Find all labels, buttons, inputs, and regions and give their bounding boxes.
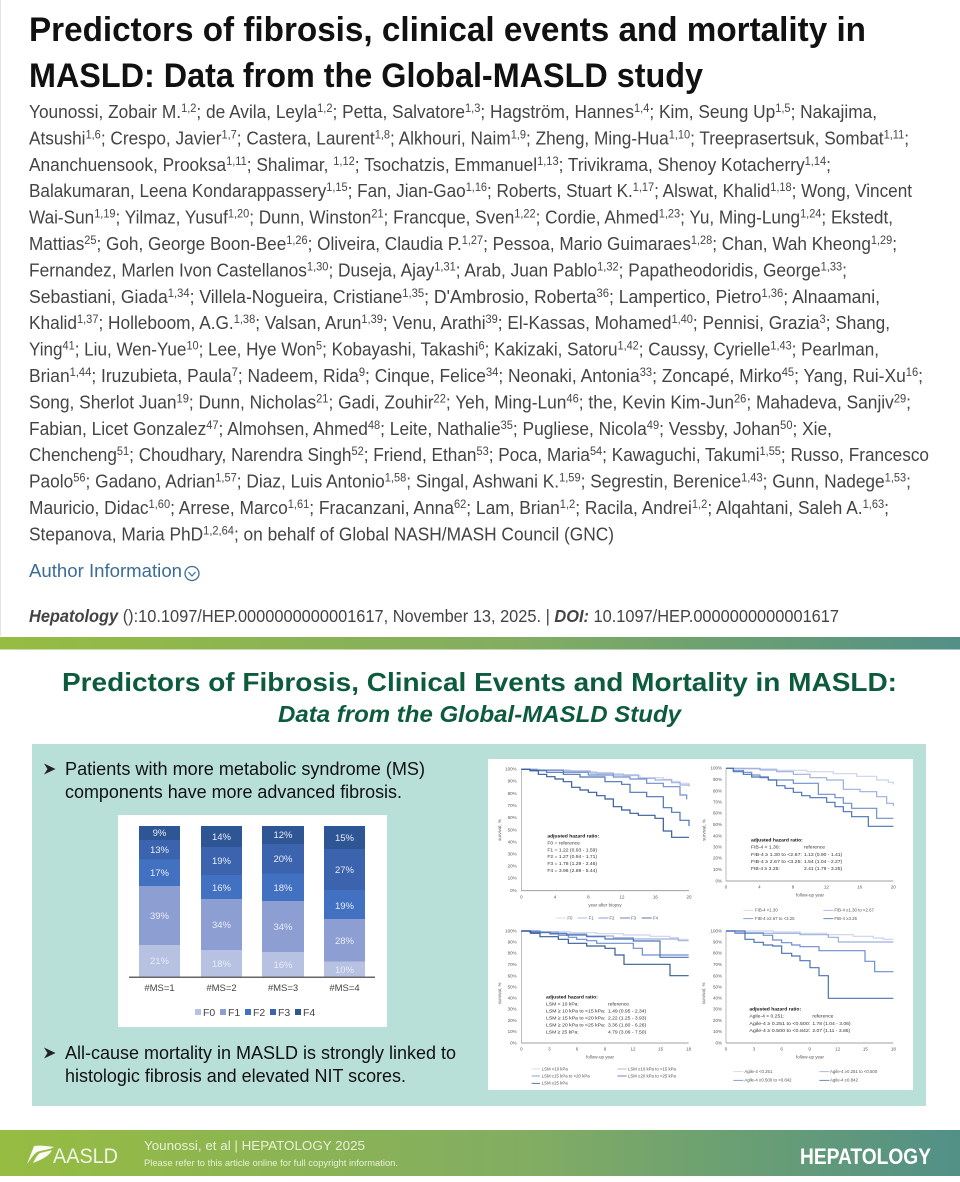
chart legend: F2	[253, 1007, 265, 1019]
survival chart: Agile-4: 12	[835, 1047, 841, 1052]
curve legend	[532, 1066, 677, 1086]
author list: Brian1,44; Iruzubieta, Paula7; Nadeem, Rida9; Cinque, Felice34; Neonaki, Antonia33; Zoncapé, Mirko45; Yang, Rui-Xu16;	[29, 366, 923, 386]
survival chart: biopsy fibrosis stage: 0	[520, 894, 523, 899]
abstract heading	[62, 667, 897, 727]
survival chart: biopsy fibrosis stage: 100%	[505, 767, 517, 772]
hazard ratio annotation: Agile-4 ≥ 0.251 to <0.500:	[749, 1021, 810, 1027]
survival chart: FIB-4: 12	[824, 885, 829, 890]
hazard ratio annotation: 1.54 (1.04 - 2.27)	[804, 859, 843, 865]
hazard ratio annotation: 2.41 (1.79 - 3.25)	[804, 866, 843, 872]
hazard ratio annotation: reference	[608, 1001, 629, 1007]
bar: MS=1: 17%	[150, 868, 170, 879]
hazard ratio annotation: 2.07 (1.11 - 3.85)	[812, 1028, 851, 1034]
hazard ratio annotation: adjusted hazard ratio:	[749, 1006, 801, 1012]
hazard ratio annotation: F0 = reference	[547, 840, 580, 846]
survival chart: Agile-4: follow-up year	[796, 1055, 824, 1060]
chart legend: F0	[203, 1007, 215, 1019]
survival chart: Agile-4: 80%	[713, 951, 722, 956]
curve legend: Agile-4 ≥0.842	[830, 1078, 858, 1083]
survival chart: biopsy fibrosis stage: 30%	[508, 851, 517, 856]
hazard ratio annotation: FIB-4 ≥ 2.67 to <3.25:	[751, 859, 802, 865]
author list: Fernandez, Marlen Ivon Castellanos1,30; Duseja, Ajay1,31; Arab, Juan Pablo1,32; Papatheodoridis, George1,33;	[29, 260, 847, 280]
survival chart: biopsy fibrosis stage: 60%	[508, 815, 517, 820]
survival chart: LSM: 60%	[508, 973, 517, 978]
bar: MS=3: 12%	[273, 830, 293, 841]
curve legend: F0	[567, 915, 573, 920]
survival chart: FIB-4: 20%	[713, 856, 722, 861]
bar: MS=2: 18%	[212, 959, 232, 970]
author list: Paolo56; Gadano, Adrian1,57; Diaz, Luis Antonio1,58; Singal, Ashwani K.1,59; Segrestin, Berenice1,43; Gunn, Nadege1,53;	[29, 472, 911, 492]
bar: MS=1: 39%	[150, 911, 170, 922]
hazard ratio annotation: LSM < 10 kPa:	[546, 1001, 579, 1007]
survival chart: LSM: follow-up year	[586, 1055, 614, 1060]
bar: MS=4: 28%	[335, 936, 355, 947]
author list: Wai-Sun1,19; Yilmaz, Yusuf1,20; Dunn, Winston21; Francque, Sven1,22; Cordie, Ahmed1,23; Yu, Ming-Lung1,24; Ekstedt,	[29, 208, 893, 228]
survival chart: LSM: 40%	[508, 996, 517, 1001]
survival chart: FIB-4: 60%	[713, 811, 722, 816]
author list: Ying41; Liu, Wen-Yue10; Lee, Hye Won5; Kobayashi, Takashi6; Kakizaki, Satoru1,42; Caussy, Cyrielle1,43; Pearlman,	[29, 340, 879, 360]
survival chart: LSM: 0%	[510, 1040, 517, 1045]
curve legend: F2	[609, 915, 615, 920]
survival chart: LSM: 18	[686, 1047, 692, 1052]
hazard ratio annotation	[751, 837, 843, 872]
panel: survival curves background	[488, 759, 913, 1090]
bar: MS=4: 27%	[335, 865, 355, 876]
hazard ratio annotation	[749, 1006, 851, 1034]
bar: MS=2: 14%	[212, 832, 232, 843]
bar: MS=2: 16%	[212, 883, 232, 894]
survival chart: LSM: 9	[604, 1047, 607, 1052]
footer citation: Please refer to this article online for full copyright information.	[144, 1158, 398, 1169]
author list: Chencheng51; Choudhary, Narendra Singh52; Friend, Ethan53; Poca, Maria54; Kawaguchi, Takumi1,55; Russo, Francesco	[29, 445, 929, 465]
survival chart: biopsy fibrosis stage: 90%	[508, 779, 517, 784]
bar: MS=3: 16%	[273, 960, 293, 971]
author list: Mattias25; Goh, George Boon-Bee1,26; Oliveira, Claudia P.1,27; Pessoa, Mario Guimaraes1,28; Chan, Wah Kheong1,29;	[29, 234, 897, 254]
bar: MS=2	[201, 826, 242, 977]
survival chart: Agile-4: 15	[863, 1047, 868, 1052]
survival chart: biopsy fibrosis stage: 10%	[508, 876, 517, 881]
curve legend: Agile-4 ≥0.251 to <0.500	[830, 1069, 878, 1074]
category labels	[144, 983, 360, 994]
survival chart: Agile-4: 70%	[713, 962, 722, 967]
survival chart: FIB-4	[701, 766, 896, 921]
hazard ratio annotation	[546, 994, 647, 1036]
title	[29, 11, 866, 95]
survival chart: LSM: 0	[520, 1047, 523, 1052]
bar: MS=2: 19%	[212, 856, 232, 867]
bar: MS=4: 15%	[335, 833, 355, 844]
hazard ratio annotation: adjusted hazard ratio:	[547, 833, 599, 839]
hazard ratio annotation: 4.79 (3.06 - 7.50)	[608, 1030, 647, 1036]
survival chart: LSM: 80%	[508, 951, 517, 956]
survival chart: biopsy fibrosis stage: survival, %	[497, 819, 502, 841]
hazard ratio annotation: Agile-4 ≥ 0.500 to <0.842:	[749, 1028, 810, 1034]
stacked bar chart: fibrosis by MS components	[118, 815, 387, 1027]
hazard ratio annotation: LSM ≥ 10 kPa to <15 kPa:	[546, 1008, 605, 1014]
hazard ratio annotation: 1.49 (0.95 - 2.34)	[608, 1008, 647, 1014]
survival chart: biopsy fibrosis stage: 8	[587, 894, 590, 899]
curve legend: LSM ≥25 kPa	[542, 1081, 568, 1086]
survival chart: LSM: 10%	[508, 1029, 517, 1034]
survival chart: LSM: 90%	[508, 940, 517, 945]
hazard ratio annotation: FIB-4 ≥ 3.25:	[751, 866, 780, 872]
curve legend: F3	[631, 915, 637, 920]
bar: MS=1	[139, 826, 180, 977]
survival chart: Agile-4: 60%	[713, 973, 722, 978]
survival chart: LSM: survival, %	[497, 982, 502, 1004]
survival chart: biopsy fibrosis stage: year after biopsy	[588, 902, 622, 907]
curve legend: FIB-4 <1.30	[755, 908, 778, 913]
survival chart: Agile-4: survival, %	[701, 982, 706, 1004]
curve legend: Agile-4 <0.251	[744, 1069, 773, 1074]
finding 2 text	[44, 1042, 456, 1086]
hazard ratio annotation: reference	[812, 1014, 834, 1020]
hazard ratio annotation: F4 = 3.96 (2.89 - 5.44)	[547, 868, 597, 874]
bar: MS=1: 9%	[153, 828, 167, 839]
survival chart: Agile-4: 3	[753, 1047, 756, 1052]
survival chart: biopsy fibrosis stage: 40%	[508, 839, 517, 844]
journal name: HEPATOLOGY	[800, 1144, 931, 1169]
category labels: #MS=1	[144, 983, 175, 994]
curve legend: F4	[653, 915, 659, 920]
author list: Atsushi1,6; Crespo, Javier1,7; Castera, Laurent1,8; Alkhouri, Naim1,9; Zheng, Ming-Hua1,10; Treeprasertsuk, Sombat1,11;	[29, 128, 909, 148]
hazard ratio annotation: adjusted hazard ratio:	[751, 837, 803, 843]
survival chart: biopsy fibrosis stage: 70%	[508, 803, 517, 808]
curve legend: FIB-4 ≥1.30 to <2.67	[834, 908, 874, 913]
survival chart: biopsy fibrosis stage: 80%	[508, 791, 517, 796]
survival chart: LSM	[497, 928, 692, 1086]
survival chart: FIB-4: 16	[857, 885, 863, 890]
finding 1 text: components have more advanced fibrosis.	[65, 781, 402, 802]
abstract heading: Predictors of Fibrosis, Clinical Events and Mortality in MASLD:	[62, 667, 897, 697]
survival chart: biopsy fibrosis stage: 50%	[508, 827, 517, 832]
hazard ratio annotation: F2 = 1.27 (0.94 - 1.71)	[547, 854, 597, 860]
survival chart: FIB-4: 4	[758, 885, 761, 890]
author information link: Author Information	[29, 561, 182, 581]
hazard ratio annotation: adjusted hazard ratio:	[546, 994, 598, 1000]
panel: summary background	[32, 744, 926, 1106]
curve legend: LSM ≥15 kPa to <20 kPa	[542, 1073, 590, 1078]
survival chart: Agile-4	[701, 928, 896, 1083]
hazard ratio annotation: 1.78 (1.04 - 3.06)	[812, 1021, 851, 1027]
curve legend: FIB-4 ≥2.67 to <3.25	[755, 916, 795, 921]
bar: MS=2: 34%	[212, 920, 232, 931]
survival chart: Agile-4: 90%	[713, 940, 722, 945]
curve legend	[743, 908, 874, 921]
finding 2 text: histologic fibrosis and elevated NIT scores.	[65, 1065, 406, 1086]
title: MASLD: Data from the Global-MASLD study	[29, 57, 703, 95]
icon: AASLD logo: AASLD	[53, 1145, 118, 1168]
chart legend: F4	[303, 1007, 315, 1019]
bar: MS=4	[324, 826, 365, 977]
chart legend: F1	[228, 1007, 240, 1019]
author list: Mauricio, Didac1,60; Arrese, Marco1,61; Fracanzani, Anna62; Lam, Brian1,2; Racila, Andrei1,2; Alqahtani, Saleh A.1,63;	[29, 498, 889, 518]
title: Predictors of fibrosis, clinical events and mortality in	[29, 11, 866, 49]
hazard ratio annotation: FIB-4 ≥ 1.30 to <2.67:	[751, 852, 802, 858]
hazard ratio annotation: LSM ≥ 20 kPa to <25 kPa:	[546, 1022, 605, 1028]
curve legend: Agile-4 ≥0.500 to <0.842	[744, 1078, 792, 1083]
survival chart: Agile-4: 10%	[713, 1029, 722, 1034]
curve legend	[556, 915, 659, 920]
survival chart: LSM: 50%	[508, 984, 517, 989]
survival chart: LSM: 12	[630, 1047, 636, 1052]
author list: Khalid1,37; Holleboom, A.G.1,38; Valsan, Arun1,39; Venu, Arathi39; El-Kassas, Mohamed1,40; Pennisi, Grazia3; Shang,	[29, 313, 890, 333]
bar: MS=4: 19%	[335, 901, 355, 912]
footer citation	[144, 1139, 398, 1169]
survival chart: FIB-4: 40%	[713, 833, 722, 838]
bar: MS=1: 13%	[150, 845, 170, 856]
survival chart: FIB-4: 20	[891, 885, 896, 890]
survival chart: LSM: 70%	[508, 962, 517, 967]
survival chart: biopsy fibrosis stage: 4	[554, 894, 557, 899]
hazard ratio annotation	[547, 833, 599, 874]
curve legend: F1	[589, 915, 594, 920]
top gradient banner	[0, 637, 960, 650]
hazard ratio annotation: 1.13 (0.90 - 1.41)	[804, 852, 843, 858]
survival chart: Agile-4: 0	[725, 1047, 728, 1052]
survival chart: FIB-4: follow-up year	[796, 892, 824, 897]
hazard ratio annotation: 2.22 (1.25 - 3.93)	[608, 1015, 647, 1021]
survival chart: Agile-4: 40%	[713, 996, 722, 1001]
category labels: #MS=4	[329, 983, 360, 994]
author list: Younossi, Zobair M.1,2; de Avila, Leyla1,2; Petta, Salvatore1,3; Hagström, Hannes1,4; Kim, Seung Up1,5; Nakajima,	[29, 102, 877, 122]
curve legend: LSM ≥20 kPa to <25 kPa	[628, 1073, 677, 1078]
survival chart: biopsy fibrosis stage: 0%	[510, 888, 517, 893]
category labels: #MS=2	[206, 983, 237, 994]
bar: MS=1: 21%	[150, 956, 170, 967]
footer citation: Younossi, et al | HEPATOLOGY 2025	[144, 1139, 365, 1153]
curve legend	[733, 1069, 878, 1083]
finding 1 text: Patients with more metabolic syndrome (MS)	[65, 758, 425, 779]
survival chart: FIB-4: 70%	[713, 800, 722, 805]
hazard ratio annotation: F1 = 1.22 (0.93 - 1.59)	[547, 847, 597, 853]
survival chart: FIB-4: 50%	[713, 822, 722, 827]
survival chart: Agile-4: 30%	[713, 1007, 722, 1012]
survival chart: LSM: 15	[658, 1047, 664, 1052]
hazard ratio annotation: F3 = 1.78 (1.29 - 2.46)	[547, 861, 597, 867]
finding 1 text	[44, 758, 425, 802]
icon: AASLD logo	[27, 1145, 118, 1168]
survival chart: FIB-4: 0	[725, 885, 728, 890]
survival chart: FIB-4: 8	[792, 885, 795, 890]
survival chart: FIB-4: 30%	[713, 844, 722, 849]
citation and DOI: Hepatology ():10.1097/HEP.0000000000001617, November 13, 2025. | DOI: 10.1097/HEP.0000000000001617	[29, 606, 839, 626]
bar: MS=3: 18%	[273, 883, 293, 894]
survival chart: Agile-4: 6	[780, 1047, 783, 1052]
bar: MS=4: 10%	[335, 965, 355, 976]
finding 2 text: All-cause mortality in MASLD is strongly linked to	[65, 1042, 456, 1063]
survival chart: FIB-4: survival, %	[701, 819, 706, 841]
category labels: #MS=3	[268, 983, 298, 994]
survival chart: LSM: 100%	[505, 928, 517, 933]
survival chart: FIB-4: 80%	[713, 788, 722, 793]
curve legend: FIB-4 ≥3.25	[834, 916, 858, 921]
survival chart: FIB-4: 0%	[716, 878, 722, 883]
author list: Stepanova, Maria PhD1,2,64; on behalf of Global NASH/MASH Council (GNC)	[29, 524, 614, 544]
footer banner	[0, 1130, 960, 1176]
author list: Fabian, Licet Gonzalez47; Almohsen, Ahmed48; Leite, Nathalie35; Pugliese, Nicola49; Vessby, Johan50; Xie,	[29, 419, 832, 439]
chart legend: F3	[278, 1007, 290, 1019]
survival chart: Agile-4: 0%	[716, 1040, 722, 1045]
chart legend	[195, 1007, 315, 1019]
curve legend: LSM ≥10 kPa to <15 kPa	[628, 1066, 677, 1071]
survival chart: LSM: 20%	[508, 1018, 517, 1023]
survival chart: FIB-4: 100%	[711, 766, 722, 771]
survival chart: biopsy fibrosis stage	[497, 767, 692, 920]
author list	[29, 102, 929, 544]
survival chart: Agile-4: 9	[808, 1047, 811, 1052]
survival chart: LSM: 6	[576, 1047, 579, 1052]
hazard ratio annotation: 3.36 (1.80 - 6.26)	[608, 1022, 647, 1028]
survival chart: biopsy fibrosis stage: 20%	[508, 864, 517, 869]
survival chart: biopsy fibrosis stage: 12	[619, 894, 625, 899]
bar: MS=3	[262, 826, 304, 977]
survival chart: Agile-4: 50%	[713, 984, 722, 989]
survival chart: biopsy fibrosis stage: 16	[653, 894, 658, 899]
survival chart: LSM: 30%	[508, 1007, 517, 1012]
hazard ratio annotation: Agile-4 < 0.251:	[749, 1014, 784, 1020]
author list: Ananchuensook, Prooksa1,11; Shalimar, 1,12; Tsochatzis, Emmanuel1,13; Trivikrama, Shenoy Kotacherry1,14;	[29, 155, 831, 175]
survival chart: biopsy fibrosis stage: 20	[686, 894, 692, 899]
abstract heading: Data from the Global-MASLD Study	[278, 701, 682, 727]
survival chart: Agile-4: 20%	[713, 1018, 722, 1023]
survival chart: Agile-4: 100%	[711, 928, 722, 933]
survival chart: Agile-4: 18	[891, 1047, 896, 1052]
hazard ratio annotation: LSM ≥ 15 kPa to <20 kPa:	[546, 1015, 605, 1021]
hazard ratio annotation: FIB-4 < 1.30:	[751, 845, 780, 851]
survival chart: LSM: 3	[548, 1047, 551, 1052]
survival chart: FIB-4: 10%	[713, 867, 722, 872]
bar: MS=3: 34%	[273, 922, 293, 933]
curve legend: LSM <10 kPa	[542, 1066, 568, 1071]
hazard ratio annotation: reference	[804, 845, 825, 851]
author list: Song, Sherlot Juan19; Dunn, Nicholas21; Gadi, Zouhir22; Yeh, Ming-Lun46; the, Kevin Kim-Jun26; Mahadeva, Sanjiv29;	[29, 392, 911, 412]
survival chart: FIB-4: 90%	[713, 777, 722, 782]
author list: Balakumaran, Leena Kondarappassery1,15; Fan, Jian-Gao1,16; Roberts, Stuart K.1,17; Alswat, Khalid1,18; Wong, Vincent	[29, 181, 912, 201]
hazard ratio annotation: LSM ≥ 25 kPa:	[546, 1030, 579, 1036]
author list: Sebastiani, Giada1,34; Villela-Nogueira, Cristiane1,35; D'Ambrosio, Roberta36; Lampertico, Pietro1,36; Alnaamani,	[29, 287, 880, 307]
bar: MS=3: 20%	[273, 854, 293, 865]
